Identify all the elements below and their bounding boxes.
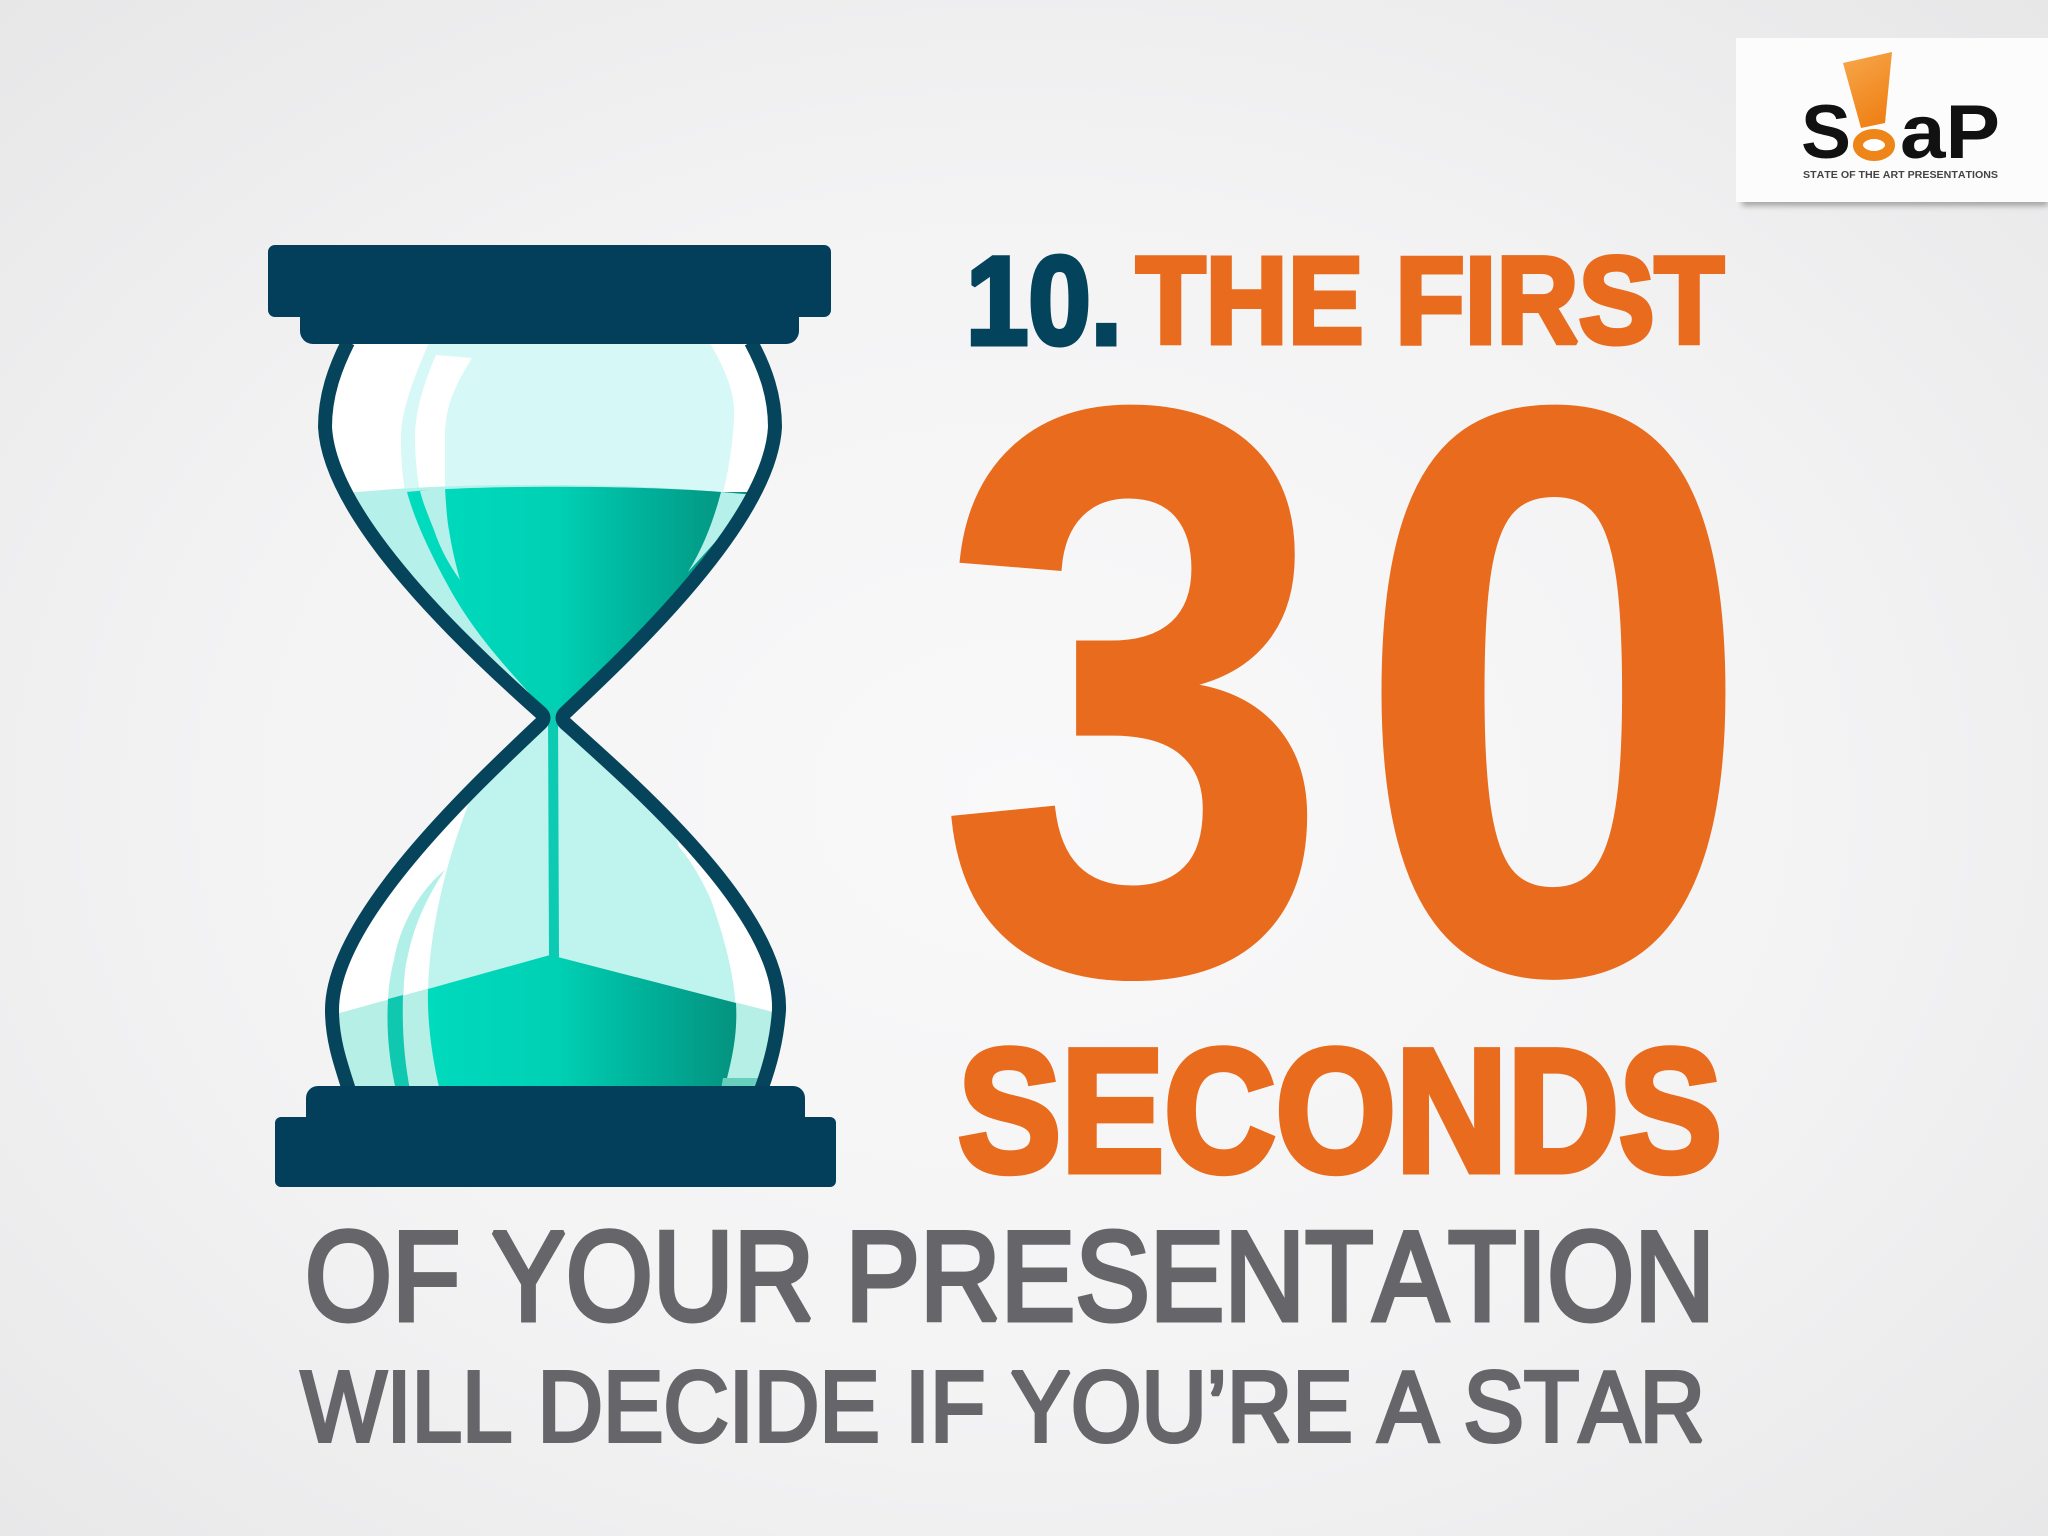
logo letter S: S	[1801, 90, 1851, 175]
big number 30	[938, 242, 1752, 1140]
sand stream	[548, 708, 559, 957]
glass outline	[325, 342, 779, 1090]
upper sand	[354, 485, 706, 693]
upper glass bulb	[332, 344, 768, 710]
lower sand	[339, 988, 772, 1086]
lower glass bulb	[339, 726, 772, 1086]
logo exclamation mark	[1843, 52, 1892, 128]
text: will decide if you're a star: WILL DECIDE IF YOU’RE A STAR	[301, 1351, 1705, 1463]
big number 30: 0	[1356, 242, 1752, 1140]
big number 30: 3	[938, 242, 1330, 1140]
glass highlight	[415, 355, 472, 492]
logo panel	[1736, 38, 2048, 206]
logo letters aP: aP	[1900, 90, 2000, 175]
heading: 10.: 10.	[966, 232, 1122, 371]
icon: hourglass	[268, 245, 836, 1187]
heading: SECONDS: SECONDS	[958, 1014, 1722, 1209]
text: of your presentation: OF YOUR PRESENTATION	[305, 1205, 1715, 1347]
logo tagline: STATE OF THE ART PRESENTATIONS	[1803, 170, 1998, 181]
top cap	[268, 245, 831, 344]
logo ring	[1858, 134, 1890, 156]
heading: THE FIRST: THE FIRST	[1136, 233, 1724, 370]
bottom cap	[275, 1086, 836, 1187]
